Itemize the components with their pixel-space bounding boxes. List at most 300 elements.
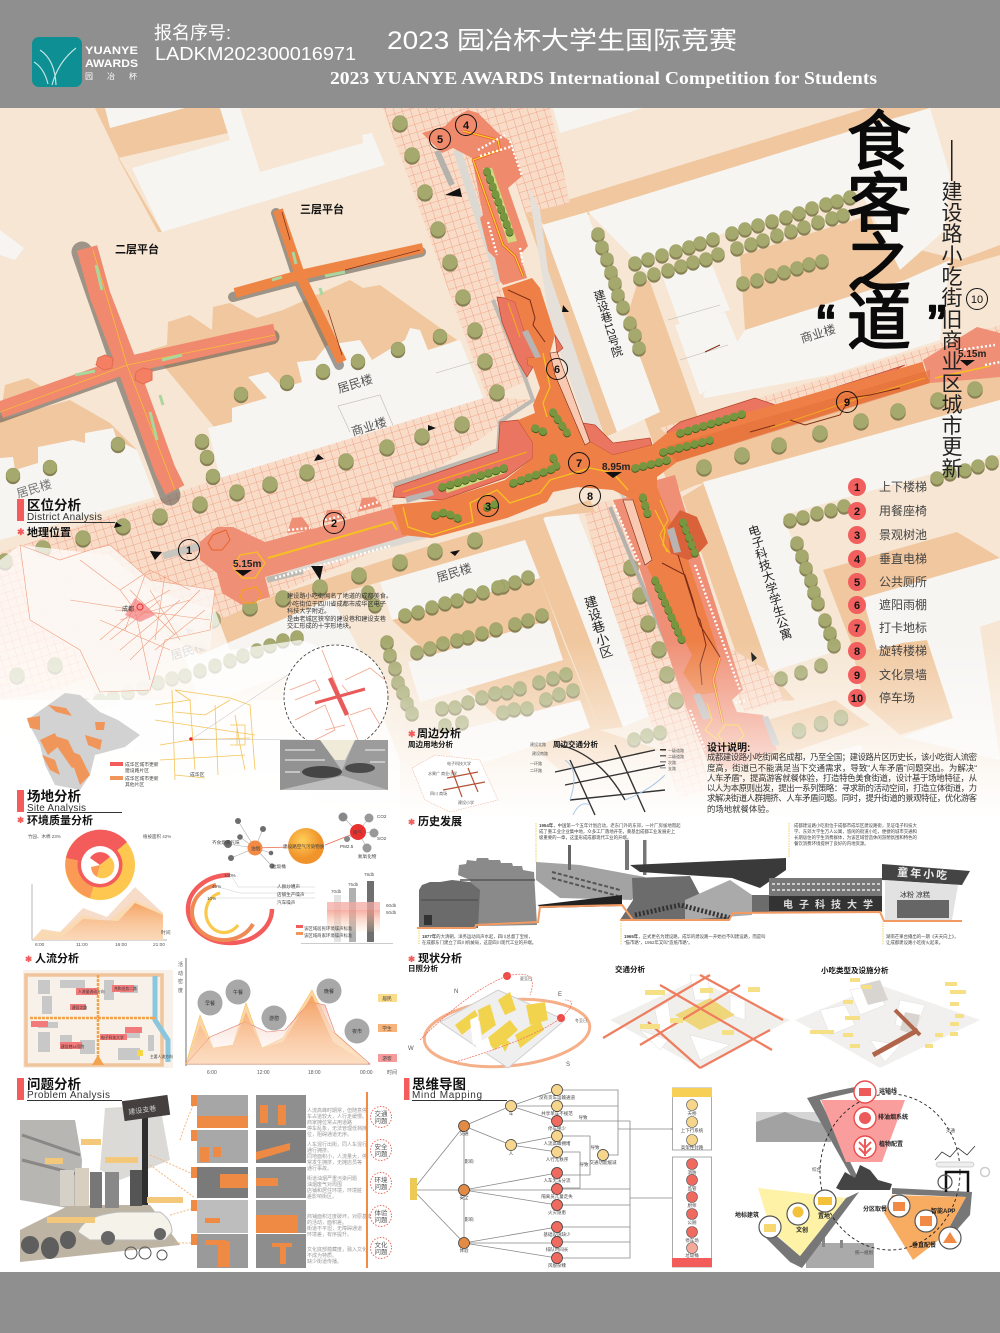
legend: numbered facilities: 遮阳雨棚	[879, 597, 927, 612]
diagram: pollution sources network: CO2	[377, 814, 387, 819]
labels: surrounding buildings: 建设巷12号院	[591, 287, 624, 359]
factory	[536, 862, 645, 900]
strategy labels: 运输线	[879, 1087, 897, 1095]
poster title: ”	[928, 293, 946, 356]
problem descriptions: 商铺面积过度破坏，对原基本	[307, 1213, 372, 1220]
district description: 交汇形成的十字形地块。	[287, 622, 355, 630]
strategy labels: 分区取餐	[863, 1205, 887, 1213]
problem descriptions: 停车乱象，无法管理低档摊	[307, 1125, 367, 1132]
dashed linking ring	[820, 1094, 960, 1250]
timeline: history captions: 1954年，中国第一个五年计划启动，老东门外的东郊，一片厂房拔地而起	[539, 822, 681, 829]
logo: YUANYE	[85, 45, 138, 57]
diagram: strategy wheel: 综合	[812, 1166, 821, 1173]
design statement: 的场地就餐体验。	[707, 804, 774, 814]
diagram: pollution sources network: 油烟	[251, 845, 261, 852]
chart: noise bars: 70db	[331, 889, 342, 894]
legend: numbered facilities	[848, 478, 927, 707]
strategy labels: 垂直配餐	[912, 1241, 936, 1249]
diagram: sunlight analysis: 冬至日	[575, 1017, 587, 1023]
legend: numbered facilities: 旋转楼梯	[879, 643, 927, 658]
photo: mountain	[756, 1112, 831, 1142]
diagram: sunlight analysis: 夏至日	[520, 975, 532, 981]
problem descriptions	[307, 1107, 372, 1265]
numbered markers on plan: 6	[554, 364, 560, 376]
map: Chenghua district with renewal areas: 成华区城市更新	[125, 775, 159, 782]
map: surrounding traffic: 建设北路	[530, 741, 546, 747]
diagram: sunlight analysis	[408, 972, 593, 1073]
diagram: sunlight analysis: W	[408, 1046, 414, 1052]
chart: noise radial arcs: 100%	[224, 873, 236, 878]
legend: numbered facilities: 垂直电梯	[879, 552, 927, 566]
problem categories: 问题	[374, 1248, 388, 1256]
legend: numbered facilities: 4	[854, 554, 861, 566]
poster title: 道	[847, 286, 911, 358]
problem photos	[191, 1095, 306, 1268]
strategy labels: 文创	[796, 1226, 808, 1234]
timeline: history captions: 学、东郊大学生万人公寓，悠闲的街道小吃，便捷的城市交通和	[794, 828, 917, 835]
poster title	[817, 106, 946, 358]
map: Chenghua road network: 成华区	[190, 771, 205, 778]
poster subtitle: 设	[942, 202, 962, 225]
subheadings: current state: 交通分析	[615, 964, 645, 974]
problem descriptions: 商家摊位常占用道路	[307, 1119, 352, 1126]
map: surrounding traffic	[530, 739, 684, 815]
registration number: 报名序号:	[154, 23, 231, 43]
numbered markers on plan: 8	[587, 491, 593, 503]
legend: numbered facilities: 用餐座椅	[879, 503, 927, 518]
legend: numbered facilities: 8	[854, 646, 860, 658]
problem descriptions: 通行拥挤。	[307, 1147, 332, 1154]
chart: noise radial arcs: 40%	[212, 884, 221, 889]
legend: numbered facilities: 2	[854, 506, 860, 518]
strategy labels: 置地	[818, 1212, 830, 1220]
header band	[0, 0, 1000, 108]
numbered markers on plan: 9	[844, 397, 850, 409]
mind map tree: 人行无秩序	[546, 1156, 569, 1163]
poster subtitle: 新	[942, 458, 962, 481]
timeline: historic photos	[417, 823, 970, 945]
chart: people flow by time: 00:00	[360, 1070, 373, 1076]
design statement: 度高，街道已不能满足当下交通需求，导致“人车矛盾”问题突出。为解决“	[707, 763, 977, 773]
labels: surrounding buildings	[14, 287, 837, 663]
timeline: history captions: "猫市路"，1962年又叫"造纸市路"。	[624, 939, 693, 946]
solutions box: bottom: 消防	[688, 1169, 697, 1176]
map: Sichuan province roads	[20, 545, 215, 695]
section: district analysis	[17, 497, 115, 523]
paved grid: east arm upper	[660, 325, 1000, 438]
design statement: 人车矛盾”，提高游客就餐体验，打造特色美食街道，设计基于场地特征，从	[707, 773, 978, 783]
gate and crowd	[630, 858, 786, 888]
map: people flow: 人流量流动方向	[78, 989, 105, 994]
strategy circles	[854, 1081, 876, 1158]
photo: factory	[806, 1232, 874, 1268]
main platform: north pink section	[422, 110, 528, 285]
poster subtitle: 吃	[942, 266, 962, 289]
timeline: history captions: 在成都东门建立了四川机械局，这是四川现代工业的开端。	[422, 939, 536, 946]
timeline: history captions: 1877年的大清朝，洋务运动风声水起，四川总督丁宝桢，	[422, 933, 533, 940]
mind map tree: 导致	[580, 1161, 589, 1168]
mind map tree: 影响	[464, 1158, 474, 1165]
problem categories	[370, 1106, 392, 1258]
numbered markers on plan: 3	[485, 501, 491, 513]
grey slabs on platform	[405, 330, 780, 746]
chart: noise bars: 60db	[386, 903, 397, 908]
mind map tree: 影响	[464, 1216, 474, 1223]
map: surrounding traffic: 二级道路	[668, 753, 684, 759]
mind map tree: 基础设施缺少	[544, 1231, 571, 1238]
logo: 园冶杯	[85, 71, 137, 81]
numbered markers on plan: 2	[331, 518, 337, 530]
problem descriptions: 环境差，有序提升。	[307, 1231, 352, 1238]
chart: noise radial arcs	[188, 873, 315, 943]
chart: people flow by time: 12:00	[257, 1070, 270, 1076]
yellow wedge	[758, 1188, 846, 1256]
mind map tree: 人	[509, 1151, 514, 1156]
timeline: history captions: 长期居住的学生消费群体，为该区域营造休闲游憩氛围和特色的	[794, 834, 918, 841]
solutions box: bottom	[672, 1157, 712, 1267]
diagram: traffic analysis	[603, 975, 790, 1068]
district description: 小吃街位于四川省成都市成华区电子	[287, 600, 386, 608]
chart: noise bars: 78db	[364, 872, 375, 877]
chart: people flow by time: 夜市	[352, 1028, 362, 1035]
white buildings	[0, 108, 1000, 815]
chart: people flow by time: 游憩	[269, 1015, 279, 1022]
main platform: west pink walkway and hexagon	[200, 507, 407, 605]
poster subtitle	[942, 140, 962, 481]
chart: air quality area: 11:00	[76, 942, 88, 948]
problem descriptions: 常发生拥挤，无摊店员等	[307, 1159, 362, 1166]
diagram: sunlight analysis: S	[566, 1062, 570, 1068]
mind map tree: 排队时间长	[546, 1246, 569, 1253]
timeline: history captions: 成都建设路小吃街位于成都市成华区建设路街，见证电子科技大	[794, 822, 918, 829]
chart: noise bars: 该区域商家环境噪声标准	[304, 932, 353, 939]
mind map tree: 停车拐少	[548, 1125, 566, 1132]
poster subtitle: 市	[942, 415, 962, 438]
diagram: pollution sources network: 齐食烟雾气味	[212, 839, 240, 846]
section: current state analysis: 现状分析	[418, 951, 462, 965]
strategy labels	[735, 1087, 955, 1249]
walkway dotted bump pads	[287, 497, 382, 533]
map: surrounding land use: 四川 商场	[430, 790, 447, 796]
subheadings: current state: 小吃类型及设施分析	[821, 965, 889, 975]
paved grid: south-east corner	[725, 645, 785, 712]
chart: noise bars: 该区域居民环境噪声标准	[304, 925, 353, 932]
problem categories: 问题	[374, 1183, 388, 1191]
labels: elevation marks	[233, 349, 986, 576]
section: district analysis: 区位分析	[27, 497, 81, 513]
chart: people flow by time: 时间	[387, 1069, 397, 1076]
numbered markers on plan	[178, 114, 988, 560]
solutions box: bottom: 公厕	[688, 1220, 697, 1226]
strategy labels: 排油烟系统	[878, 1113, 908, 1121]
outlines on buildings	[338, 305, 728, 432]
poster subtitle: 街	[942, 287, 962, 310]
map: Chenghua district with renewal areas: 其他片区	[125, 781, 144, 788]
mind map tree: 风貌杂糅	[548, 1262, 566, 1269]
chart: donut of green space	[28, 830, 171, 900]
diagram: pollution sources network: 尾气	[353, 829, 363, 836]
section: problem analysis: 问题分析	[27, 1076, 81, 1092]
chart: noise radial arcs: 汽车噪声	[277, 899, 296, 906]
diagram: pollution sources network: SO2	[377, 836, 387, 841]
chart: people flow by time: 晚餐	[324, 988, 334, 995]
numbered markers on plan: 1	[186, 545, 192, 557]
labels: elevation marks: 5.15m	[233, 559, 261, 570]
section: history	[408, 814, 462, 828]
timeline: historic photos: 童年小吃	[897, 865, 950, 882]
legend: numbered facilities: 6	[854, 600, 860, 612]
problem descriptions: 缺少街道传播。	[307, 1258, 342, 1265]
diagram: pollution sources network: 垃圾桶	[272, 863, 286, 870]
competition title: 2023 园冶杯大学生国际竞赛	[387, 27, 737, 55]
problem descriptions: 差影响街区。	[307, 1193, 337, 1200]
section: site analysis: Site Analysis	[27, 803, 86, 814]
map: surrounding traffic: 支路	[668, 765, 676, 771]
timeline: history captions: 湖南芒果台播出的一期《天天向上》，	[886, 933, 958, 940]
diagram: pollution sources network: 建设路空气污染物质	[283, 843, 325, 850]
chart: air quality area: 时间	[161, 929, 171, 936]
orange timeline	[417, 905, 962, 928]
timeline: historic photos: 冰粉 凉糕	[900, 890, 930, 899]
poster subtitle: 业	[942, 351, 962, 374]
panel: master plan map	[0, 108, 1000, 820]
problem categories: 安全	[374, 1142, 388, 1151]
problem categories: 文化	[374, 1240, 388, 1249]
map: Chenghua district with renewal areas: 成华区城市更新	[125, 761, 159, 768]
paved grid: east-west street west part	[0, 397, 533, 700]
section: site analysis	[17, 788, 122, 814]
subheading: environmental quality: ✱	[17, 815, 25, 825]
problem categories: 问题	[374, 1117, 388, 1125]
diagram: strategy wheel	[735, 1081, 990, 1268]
castle	[458, 858, 537, 926]
poster subtitle: 旧	[942, 309, 962, 332]
poster subtitle: 建	[942, 181, 962, 204]
timeline: history captions: 1965年，正式更名为建设路，成华的建设路一开始也不叫建设路，而是叫	[624, 933, 766, 940]
mind map tree: 安全	[460, 1194, 469, 1201]
legend: numbered facilities: 3	[854, 530, 860, 542]
mind map tree: 导致	[578, 1114, 588, 1121]
section: problem analysis: Problem Analysis	[27, 1090, 110, 1101]
mind map tree: 导致	[590, 1144, 600, 1151]
problem descriptions: 位，阻碍通道无序。	[307, 1131, 352, 1138]
poster subtitle: 商	[942, 330, 962, 353]
pink wedge	[821, 1100, 905, 1162]
paved grid: south part	[583, 500, 710, 800]
subheading: geographic location: ✱	[17, 527, 25, 537]
poster subtitle: 城	[942, 394, 962, 417]
subheading: geographic location	[17, 525, 71, 539]
diagram: food type and facilities	[795, 978, 980, 1068]
section: current state analysis	[408, 951, 462, 965]
labels: elevation marks: 5.15m	[958, 349, 986, 360]
main platform: east pink end	[923, 327, 1000, 383]
poster subtitle: 路	[942, 223, 962, 246]
darker overlay east arm	[665, 370, 930, 462]
labels: surrounding buildings: 电子科技大学学生公寓	[745, 523, 794, 642]
numbered markers on plan: 5	[437, 134, 443, 146]
map: surrounding traffic: 二环路	[530, 767, 542, 773]
solutions box: top: 上下行系统	[681, 1127, 704, 1134]
legend: numbered facilities: 公共厕所	[879, 575, 927, 589]
map: people flow: 共和业务二路	[114, 986, 137, 991]
numbered markers on plan: 7	[576, 458, 582, 470]
chart: air quality area: 21:00	[153, 942, 165, 948]
labels: floor platforms: 二层平台	[115, 242, 159, 256]
poster title: 食	[847, 106, 911, 178]
subheading: geographic location: 地理位置	[27, 525, 71, 539]
chart: people flow by time: 游客	[382, 1055, 392, 1062]
labels: surrounding buildings: 建设巷小区	[581, 594, 614, 661]
section: surrounding analysis: ✱	[408, 729, 416, 739]
vehicles and figures	[836, 1165, 892, 1190]
footer band	[0, 1272, 1000, 1333]
main platform: pink red terraces	[393, 297, 905, 500]
chart: noise radial arcs: 人群炒嘈声	[277, 883, 300, 890]
labels: surrounding buildings: 居民楼	[168, 638, 207, 663]
problem descriptions: 街道油烟严重污染问题	[307, 1175, 357, 1182]
labels: surrounding buildings: 居民楼	[434, 560, 473, 585]
district description: 科技大学附近。	[287, 607, 330, 615]
labels: floor platforms: 三层平台	[300, 202, 344, 216]
map: Chenghua district with renewal areas: 建设路片区	[125, 767, 149, 774]
chart: people flow by time: 午餐	[233, 989, 243, 996]
collage: street scene	[20, 1095, 197, 1262]
chart: people flow by time: 学生	[382, 1025, 392, 1032]
map: surrounding land use	[412, 755, 498, 812]
photo: street view	[280, 740, 388, 790]
solutions box: bottom: 厨师	[688, 1202, 697, 1209]
timeline: history captions: 极重要的一章，这里形成成都现代工业的开端。	[539, 834, 631, 841]
subheadings: current state: 日照分析	[408, 963, 438, 973]
section: surrounding analysis	[408, 726, 461, 749]
problem descriptions: 街道不平坦，无障碍通道	[307, 1225, 362, 1232]
subheading: people flow: 人流分析	[35, 951, 79, 965]
map: people flow	[23, 970, 173, 1068]
labels: surrounding buildings: 居民楼	[335, 371, 374, 396]
poster subtitle: 小	[942, 245, 962, 268]
subheading: environmental quality: 环境质量分析	[27, 813, 93, 827]
map: surrounding land use: 水果广 商业小学	[428, 770, 457, 776]
left fade of map	[0, 545, 400, 820]
design statement: 以人为本原则出发，提出一系列策略：寻求新的活动空间，打造立体街道，力	[707, 783, 977, 793]
problem descriptions: 车占道较大，人行走缓慢。	[307, 1113, 367, 1120]
chart: noise radial arcs: 店铺生产噪声	[277, 891, 305, 898]
timeline: history captions	[422, 822, 958, 946]
diagram: strategy wheel: 统一规划	[855, 1249, 873, 1256]
chart: donut of green space: 竹园、木棉 23%	[28, 833, 61, 840]
problem descriptions: 人车混行出街，同人车混行	[307, 1141, 367, 1148]
map: people flow: 电子科技大学	[101, 1035, 124, 1040]
solutions box: bottom: 垃圾桶	[685, 1252, 699, 1259]
planting beds light green	[445, 168, 517, 493]
timeline: history captions: 成了重工业企业集中地，众多工厂落地开花，奠基出成都工业发展史上	[539, 828, 676, 835]
diagram: strategy wheel: 交通	[946, 1127, 955, 1134]
solutions box: top: 高架性封路	[681, 1144, 704, 1151]
mind map tree: 隔离员儿童走失	[541, 1193, 573, 1200]
mind map tree: 没有货车运输通道	[539, 1094, 575, 1101]
mind map tree: 共享单车不规范	[541, 1110, 573, 1117]
mind map tree: 交通功能缓减	[590, 1159, 617, 1166]
divider: problem categories	[366, 1092, 368, 1268]
map: Sichuan province roads: 成都	[122, 605, 134, 613]
mind map tree: 火灾隐患	[548, 1209, 566, 1216]
problem descriptions: 的活动，面积差。	[307, 1219, 347, 1226]
map: surrounding land use: 电子科技大学	[447, 760, 471, 766]
light canopy strips	[550, 352, 652, 565]
section: surrounding analysis: 周边用地分析	[408, 739, 453, 749]
logo: AWARDS	[85, 58, 138, 70]
third floor platform	[235, 210, 423, 362]
mind map tree: 车	[509, 1110, 514, 1117]
map: surrounding traffic: 周边交通分析	[553, 739, 598, 749]
section: site analysis: 场地分析	[27, 788, 81, 804]
legend: numbered facilities: 景观树池	[879, 527, 927, 542]
map: people flow: 建设巷14号院	[61, 1044, 84, 1049]
solutions box: top	[672, 1088, 712, 1151]
problem descriptions: 店铺和居住环境，环境脏	[307, 1187, 362, 1194]
legend: numbered facilities: 1	[854, 482, 860, 494]
district description: 建设路小吃街闻名了地道的成都美食。	[287, 592, 392, 600]
mind map tree: 交通	[460, 1130, 469, 1137]
hex bump by south arm	[668, 510, 708, 560]
peach building surrounds	[0, 108, 1000, 810]
university entrance	[769, 878, 882, 912]
trees	[0, 116, 998, 746]
labels: surrounding buildings: 居民楼	[14, 476, 53, 501]
grey outer segments	[807, 1087, 859, 1190]
section: history: 历史发展	[418, 814, 462, 828]
chart: air quality area	[32, 884, 171, 948]
pale grey sidewalk east of north arm	[528, 188, 603, 437]
chart: people flow by time: 动	[178, 970, 183, 977]
problem descriptions: 文化底部蕴藏度，融入文化	[307, 1246, 367, 1253]
map: surrounding land use: 建设小学	[458, 799, 474, 805]
legend: numbered facilities: 9	[854, 670, 860, 682]
design statement: 求解决街道人群拥挤、人车矛盾问题。同时，提升街道的景观特征，优化游客	[707, 793, 978, 803]
problem categories: 环境	[374, 1175, 388, 1184]
map: surrounding traffic: 一级道路	[668, 747, 684, 753]
legend: numbered facilities: 上下楼梯	[879, 479, 927, 494]
labels: surrounding buildings: 商业楼	[798, 321, 837, 346]
competition subtitle: 2023 YUANYE AWARDS International Competition for Students	[330, 68, 877, 88]
section: mind mapping	[404, 1076, 507, 1101]
map: people flow: 建设北路	[72, 1005, 87, 1010]
chart: air quality area: 16:00	[115, 942, 127, 948]
poster subtitle: 更	[942, 436, 962, 459]
section: surrounding analysis: 周边分析	[417, 726, 461, 740]
district description: 是由老城区狭窄的建设巷和建设支巷	[287, 615, 387, 623]
main platform: central orange deck	[392, 278, 930, 695]
numbered markers on plan: 4	[463, 120, 470, 132]
problem descriptions: 人流高峰时期常，但随意停	[307, 1107, 367, 1114]
mind map tree: 人车无法分流	[544, 1177, 571, 1184]
collage: street scene: 建设支巷	[128, 1104, 157, 1116]
mind map tree: 人流高峰拥堵	[544, 1140, 571, 1147]
strategy labels: 地标建筑	[735, 1211, 759, 1219]
chart: noise bars	[296, 872, 397, 944]
chart: people flow by time: 早餐	[205, 1000, 215, 1007]
map: Chenghua road network	[155, 690, 255, 780]
section: current state analysis: ✱	[408, 954, 416, 964]
planting on platform	[435, 171, 745, 640]
legend: numbered facilities: 5	[854, 577, 860, 589]
chart: air quality area: 6:00	[35, 942, 45, 948]
problem categories: 问题	[374, 1216, 388, 1224]
diagram: sunlight analysis: N	[454, 989, 458, 995]
yellow ticks	[419, 823, 883, 945]
subheading: people flow: ✱	[25, 954, 33, 964]
